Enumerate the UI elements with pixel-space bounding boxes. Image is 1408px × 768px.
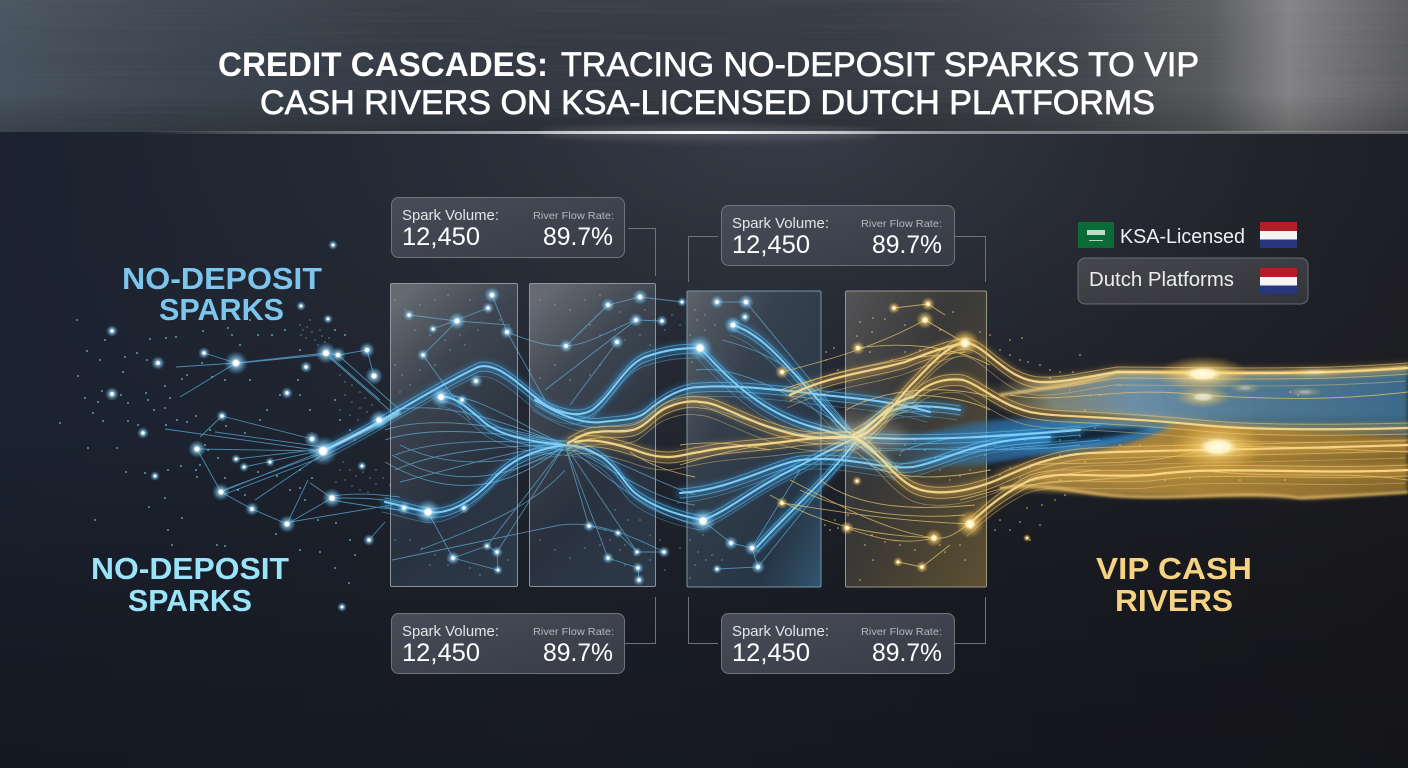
- chart: gold bundle offset far: [565, 356, 1405, 536]
- callout: stats card top right: River Flow Rate:: [861, 218, 942, 230]
- callout: stats card top right: [722, 206, 954, 266]
- chart: crossing glow: [807, 421, 907, 453]
- callout: stats card top right: 89.7%: [872, 231, 942, 259]
- callout: stats card bottom right: 89.7%: [872, 639, 942, 667]
- callout: stats card top left: Spark Volume:: [402, 208, 499, 224]
- legend: ksa-licensed: KSA-Licensed: [1120, 226, 1245, 248]
- icon: saudi flag: [1078, 222, 1114, 248]
- callout: stats card bottom left: 12,450: [402, 639, 480, 667]
- title: TRACING NO-DEPOSIT SPARKS TO VIP: [561, 46, 1199, 84]
- label: no-deposit sparks upper: [122, 261, 322, 327]
- panel: glass panel 4: [846, 291, 986, 587]
- chart: blue main strands: [323, 325, 1080, 547]
- callout: stats card bottom right: River Flow Rate:: [861, 626, 942, 638]
- chart: blue nodes: [105, 240, 765, 612]
- chart: blue bundle offset up: [323, 321, 1080, 543]
- panel: glass panel 3: [687, 291, 821, 587]
- connector lines: [625, 228, 986, 644]
- callout: stats card bottom left: [392, 614, 624, 674]
- legend: dutch platforms box: [1078, 258, 1308, 304]
- callout: stats card top right: 12,450: [732, 231, 810, 259]
- chart: network dots: [60, 295, 1298, 583]
- label: no-deposit sparks lower: [91, 551, 289, 618]
- callout: stats card top left: 12,450: [402, 223, 480, 251]
- panel: glass panel 1: [390, 284, 518, 586]
- callout: stats card top right: Spark Volume:: [732, 216, 829, 232]
- title: [218, 46, 1199, 122]
- chart: blue bundle offset far: [320, 335, 1077, 557]
- label: no-deposit sparks lower: SPARKS: [128, 583, 252, 618]
- callout: stats card bottom right: Spark Volume:: [732, 624, 829, 640]
- chart: gold bundle offset up: [568, 338, 1408, 518]
- callout: stats card bottom left: 89.7%: [543, 639, 613, 667]
- title: CASH RIVERS ON KSA-LICENSED DUTCH PLATFORMS: [260, 84, 1155, 122]
- chart: river highlights: [1157, 356, 1345, 471]
- callout: stats card bottom left: Spark Volume:: [402, 624, 499, 640]
- label: vip cash rivers: RIVERS: [1115, 583, 1233, 618]
- chart: blue strand glow: [323, 325, 1080, 547]
- panel: glass panel 2: [530, 284, 656, 586]
- title: CREDIT CASCADES:: [218, 46, 548, 84]
- label: vip cash rivers: [1096, 551, 1252, 618]
- chart: gold strand glow: [568, 343, 1408, 523]
- legend: dutch platforms box: Dutch Platforms: [1089, 269, 1234, 291]
- chart: bright spark trunk: [323, 412, 400, 451]
- callout: stats card bottom left: River Flow Rate:: [533, 626, 614, 638]
- callout: stats card top left: 89.7%: [543, 223, 613, 251]
- chart: gold bundle offset down: [568, 349, 1408, 529]
- chart: gold nodes: [775, 297, 1031, 573]
- callout: stats card bottom right: 12,450: [732, 639, 810, 667]
- chart: blue spark network lines: [165, 350, 400, 540]
- callout: stats card bottom right: [722, 614, 954, 674]
- header band: [0, 0, 1408, 141]
- callout: stats card top left: [392, 198, 624, 258]
- label: no-deposit sparks lower: NO-DEPOSIT: [91, 551, 289, 586]
- chart: golden cash river: [870, 367, 1408, 499]
- icon: netherlands flag upper: [1260, 222, 1297, 248]
- chart: thin gold strands: [630, 304, 1408, 567]
- label: no-deposit sparks upper: NO-DEPOSIT: [122, 261, 322, 296]
- label: vip cash rivers: VIP CASH: [1096, 551, 1252, 586]
- chart: blue bundle offset down: [323, 330, 1080, 552]
- chart: gold main strands: [568, 343, 1408, 523]
- callout: stats card top left: River Flow Rate:: [533, 210, 614, 222]
- chart: thin blue strands: [385, 295, 1100, 580]
- label: no-deposit sparks upper: SPARKS: [159, 292, 284, 327]
